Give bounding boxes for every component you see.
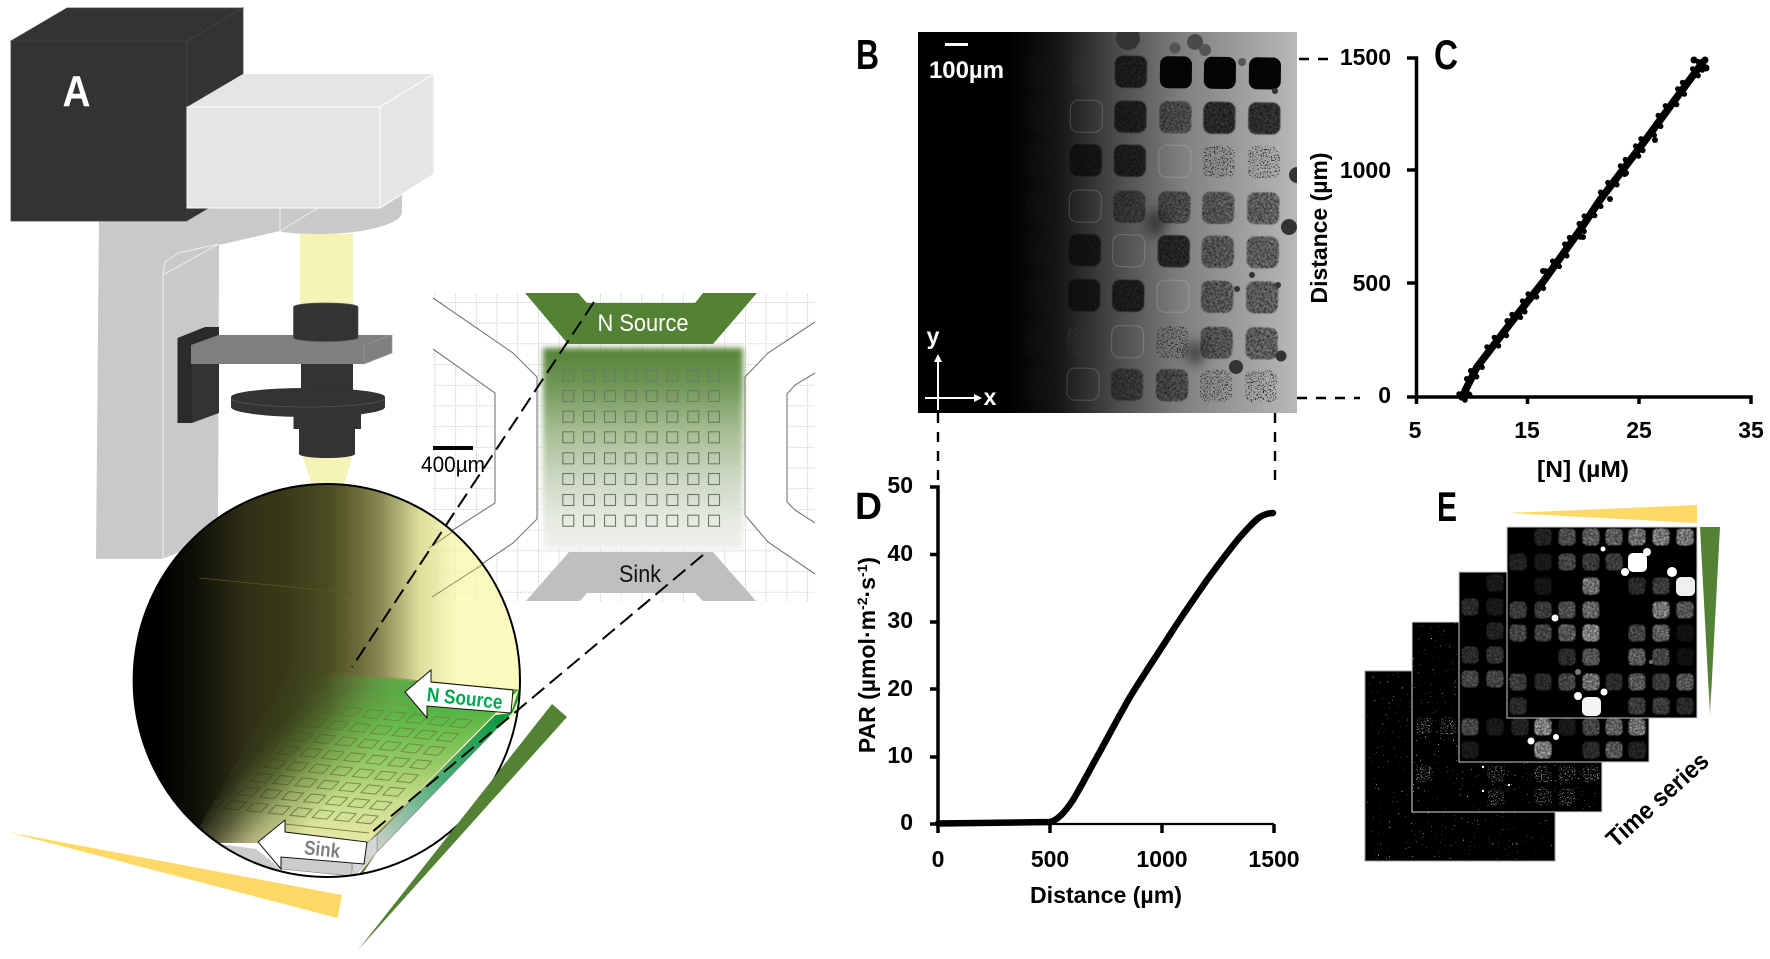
C y tick labels: 500	[1353, 270, 1391, 296]
panel A: microscope setup	[11, 8, 434, 559]
D y tick labels	[887, 472, 913, 835]
C y axis title: Distance (µm)	[1306, 152, 1332, 304]
C axes	[1407, 58, 1751, 404]
D y tick labels: 10	[887, 742, 913, 768]
light gray lamp box	[187, 74, 434, 208]
panel C: distance vs nitrogen chart	[1306, 31, 1764, 482]
C y tick labels: 1500	[1340, 44, 1391, 70]
xy axes	[925, 323, 997, 410]
D x tick labels: 0	[932, 846, 944, 872]
frame 4	[1507, 527, 1697, 718]
D y axis title: )	[854, 557, 880, 565]
dotted grid background	[433, 293, 815, 601]
D y axis title: ·s	[854, 577, 880, 597]
panel letter B: B	[856, 31, 879, 78]
stage bracket	[178, 327, 219, 423]
microwell array	[563, 370, 720, 526]
upper objective cylinder	[294, 303, 358, 342]
panel letter E: E	[1437, 483, 1457, 530]
D y tick labels: 40	[887, 540, 913, 566]
D y tick labels: 20	[887, 675, 913, 701]
panel letter A: A	[62, 67, 90, 116]
white channels	[433, 298, 815, 597]
sink reservoir: Sink	[619, 561, 662, 588]
C x tick labels: 25	[1626, 417, 1652, 443]
dashed zoom line upper	[352, 302, 594, 667]
scale bar 100 um	[929, 43, 1004, 84]
C y tick labels	[1340, 44, 1391, 408]
C x axis title: [N] (µM)	[1537, 456, 1629, 482]
microfluidic chip top view	[421, 293, 815, 601]
D y axis title: -2	[854, 597, 870, 610]
sink reservoir	[526, 552, 756, 601]
C x tick labels: 35	[1738, 417, 1764, 443]
C y tick labels: 0	[1378, 382, 1391, 408]
D axes	[930, 487, 1274, 833]
C x tick labels: 5	[1409, 417, 1422, 443]
panel letter D: D	[855, 486, 882, 528]
frame 1	[1365, 671, 1555, 861]
arrow: sink: Sink	[303, 837, 342, 863]
C x tick labels	[1409, 417, 1764, 443]
lens contents	[134, 485, 519, 876]
micrograph image	[918, 26, 1305, 413]
arrow: sink	[258, 820, 367, 869]
D y tick labels: 50	[887, 472, 913, 498]
frame 3	[1459, 572, 1649, 762]
arrow: N source	[405, 670, 513, 718]
chamber gradient	[543, 348, 743, 550]
lower objective and disc	[231, 364, 385, 458]
D x tick labels: 500	[1031, 846, 1069, 872]
N source reservoir	[525, 293, 757, 344]
C x tick labels: 15	[1514, 417, 1540, 443]
green nitrogen wedge E	[1700, 527, 1720, 716]
D y axis title: -1	[854, 564, 870, 577]
time series label: Time series	[1601, 747, 1715, 853]
lower light cone	[303, 457, 352, 486]
D x tick labels: 1000	[1136, 846, 1188, 872]
upper light beam	[300, 234, 353, 306]
yellow light wedge	[8, 832, 342, 918]
scale bar 400 um: 400µm	[421, 452, 485, 477]
panel D: PAR vs distance chart	[854, 472, 1300, 908]
panel letter C: C	[1434, 31, 1458, 78]
panel E: fluorescence time series	[1365, 483, 1720, 861]
channel outlines	[433, 298, 815, 597]
D x axis title: Distance (µm)	[1030, 882, 1182, 908]
yellow light wedge E	[1508, 505, 1697, 523]
xy axes: x	[984, 384, 997, 410]
C y tick labels: 1000	[1340, 157, 1391, 183]
frame 2	[1412, 622, 1602, 812]
D x tick labels: 1500	[1248, 846, 1300, 872]
arrow: N source: N Source	[426, 684, 504, 714]
stage plate	[191, 335, 392, 364]
scale bar 100 um: 100µm	[929, 57, 1004, 84]
dashed zoom line lower	[371, 555, 703, 833]
C scatter data	[1458, 56, 1710, 400]
lens outline	[134, 484, 520, 877]
D y tick labels: 0	[900, 809, 913, 835]
magnified lens view	[130, 480, 540, 890]
dashed guide lines	[938, 59, 1360, 487]
D PAR curve	[938, 513, 1273, 824]
black camera box	[11, 8, 243, 221]
D y tick labels: 30	[887, 607, 913, 633]
N source reservoir: N Source	[598, 310, 688, 337]
D x tick labels	[932, 846, 1300, 872]
panel B: micrograph	[856, 26, 1360, 487]
xy axes: y	[927, 323, 940, 349]
green nitrogen wedge	[358, 704, 567, 950]
D y axis title: PAR (µmol·m	[854, 610, 880, 753]
microscope gray body	[96, 190, 402, 559]
